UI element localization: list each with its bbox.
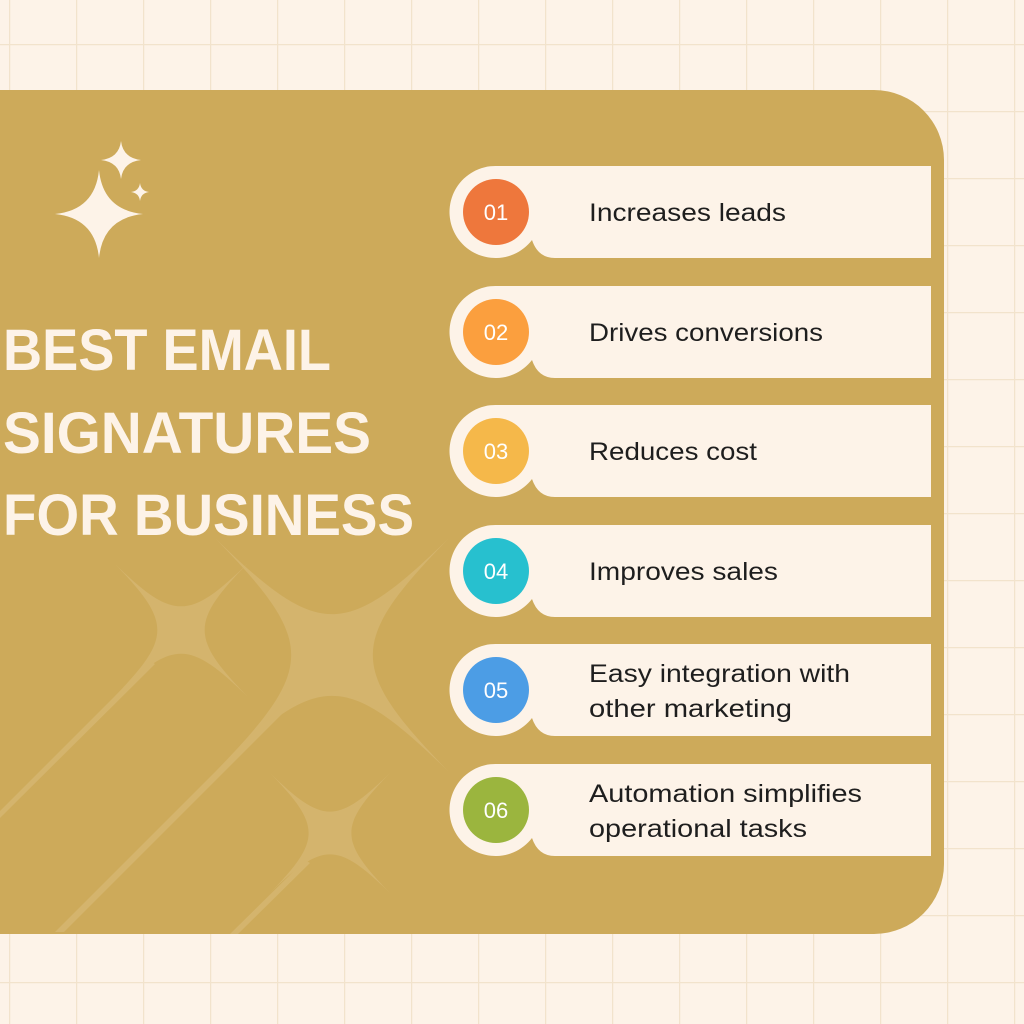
item 02: 02 bbox=[484, 320, 508, 345]
item 01: Increases leads bbox=[589, 199, 786, 227]
item 01: 01 bbox=[484, 200, 508, 225]
title: BEST EMAIL bbox=[3, 318, 331, 383]
item 06: operational tasks bbox=[589, 815, 807, 843]
item 01 bbox=[450, 166, 931, 258]
panel: gold background bbox=[0, 90, 944, 934]
title: FOR BUSINESS bbox=[3, 483, 414, 548]
item 06: Automation simplifies bbox=[589, 780, 862, 808]
item 02: Drives conversions bbox=[589, 319, 823, 347]
item 06 bbox=[450, 764, 931, 856]
item 05: 05 bbox=[484, 678, 508, 703]
item 04 bbox=[450, 525, 931, 617]
item 03 bbox=[450, 405, 931, 497]
item 05: other marketing bbox=[589, 695, 792, 723]
item 04: Improves sales bbox=[589, 558, 778, 586]
decorative faint sparkles bbox=[0, 422, 565, 953]
item 03: 03 bbox=[484, 439, 508, 464]
item 03: Reduces cost bbox=[589, 438, 757, 466]
title bbox=[3, 318, 414, 548]
item 05: Easy integration with bbox=[589, 660, 850, 688]
item 06: 06 bbox=[484, 798, 508, 823]
title: SIGNATURES bbox=[3, 401, 371, 466]
item 05 bbox=[450, 644, 931, 736]
item 04: 04 bbox=[484, 559, 508, 584]
item 02 bbox=[450, 286, 931, 378]
icon: sparkles bbox=[55, 141, 149, 258]
